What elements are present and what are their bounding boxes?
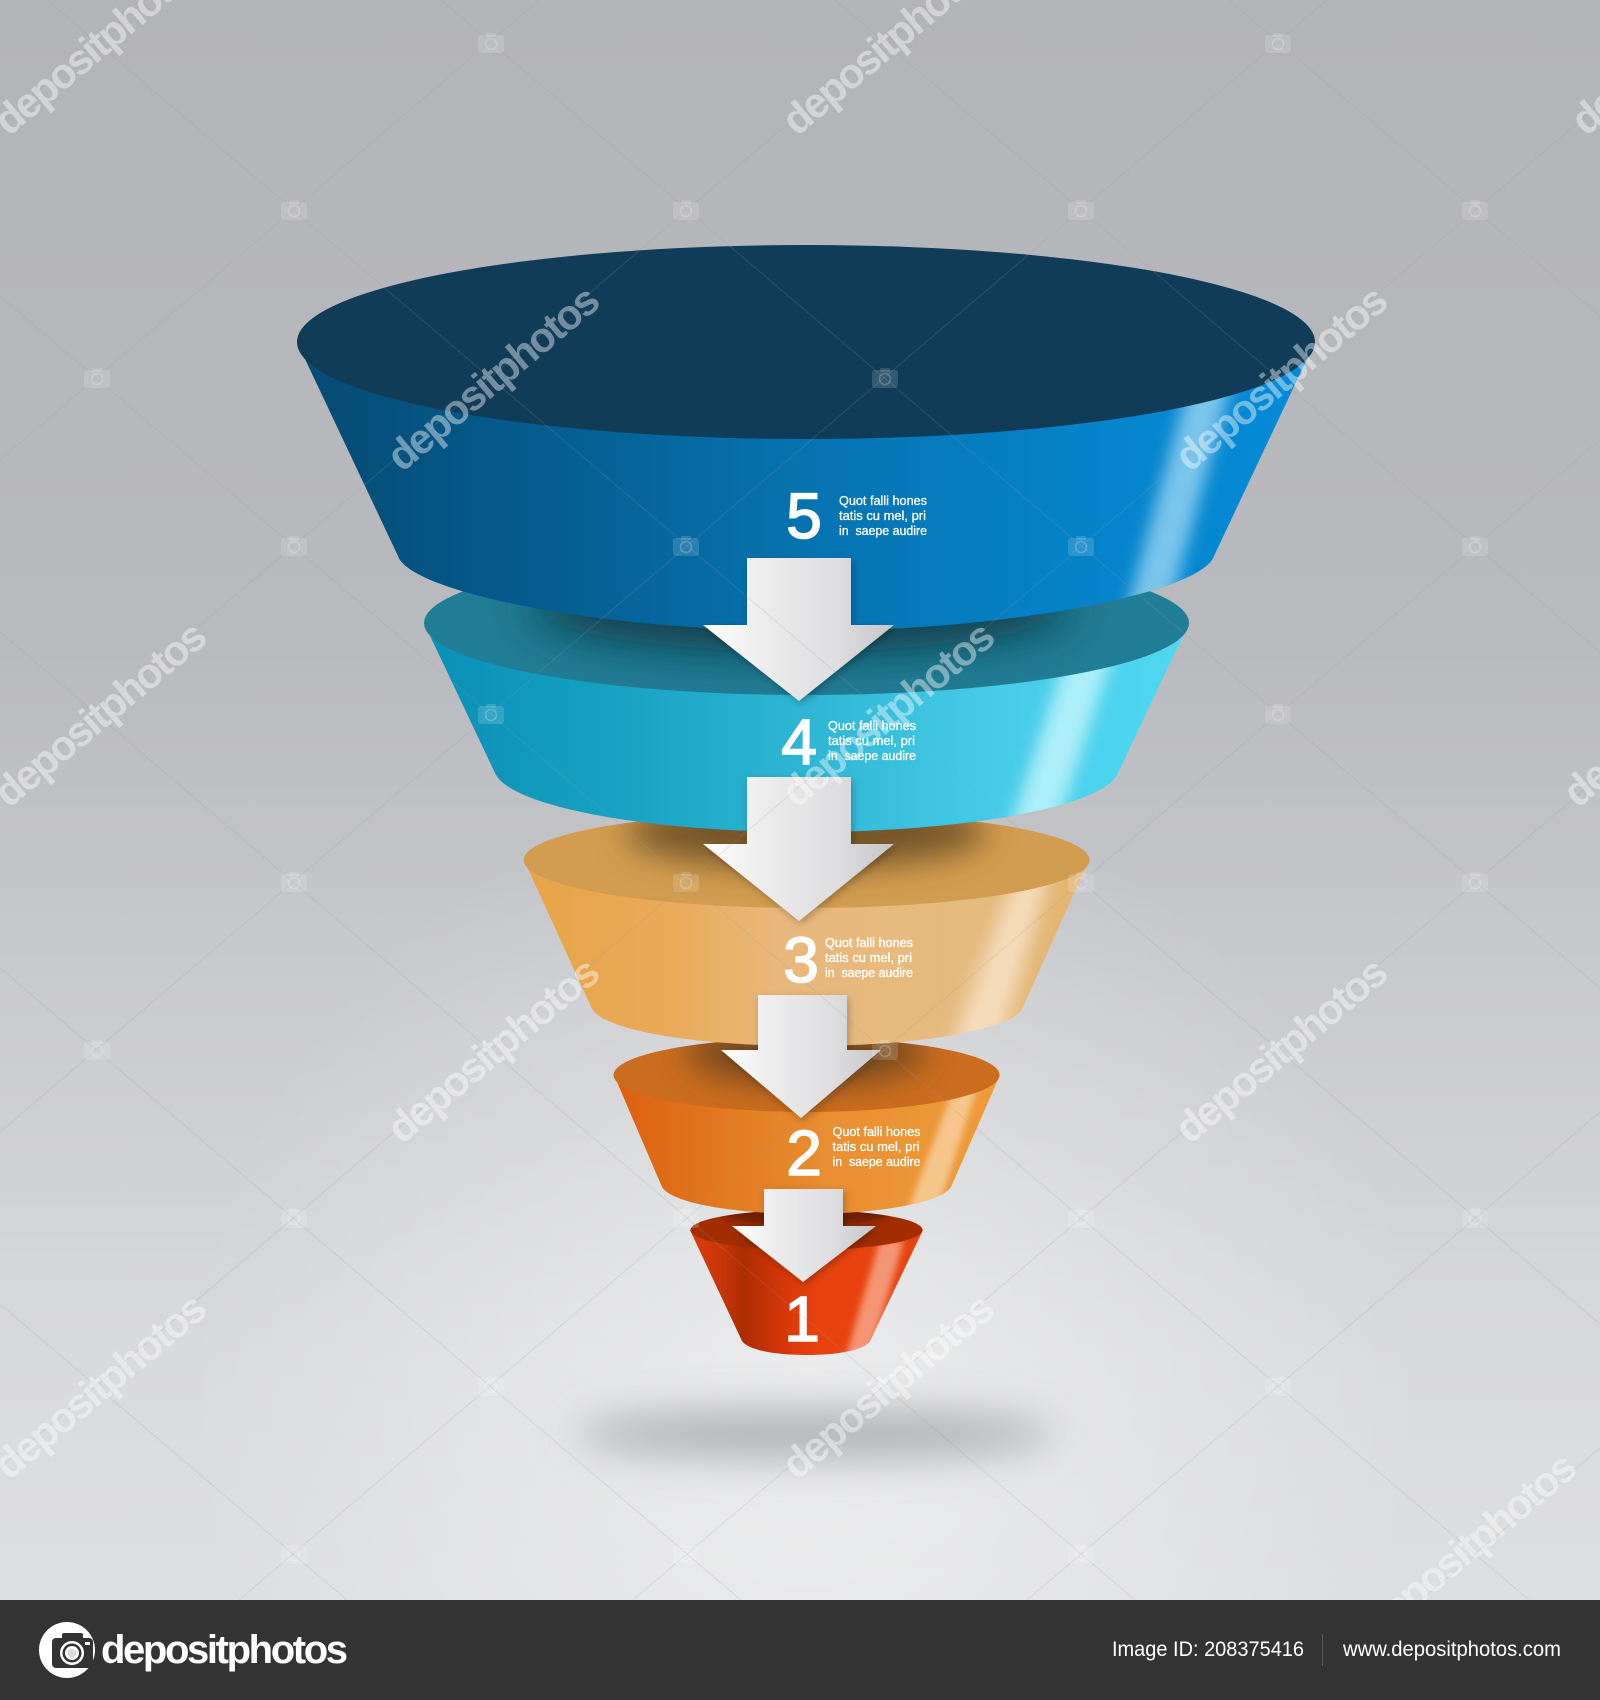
- arrow: 2 to 1: [732, 1189, 876, 1282]
- label 5: tatis cu mel, pri: [839, 509, 926, 523]
- watermark text: depositphotos: [378, 275, 608, 480]
- arrow: 4 to 3: [703, 777, 894, 921]
- label 4: Quot falli hones: [828, 719, 916, 733]
- watermark camera icons: [84, 33, 1488, 1564]
- label 3: 3: [783, 924, 819, 996]
- tier 2: [614, 1042, 1000, 1213]
- label 5: [786, 480, 927, 552]
- arrow: 5 to 4: [703, 558, 894, 701]
- funnel: [297, 245, 1315, 1356]
- website: www.depositphotos.com: [1342, 1638, 1561, 1661]
- footer bar: [0, 1600, 1600, 1700]
- label 5: 5: [786, 480, 822, 552]
- watermark text: depositphotos: [773, 611, 1003, 816]
- image id: Image ID: 208375416: [1112, 1638, 1304, 1661]
- label 2: in saepe audire: [832, 1155, 921, 1169]
- label 4: 4: [781, 706, 817, 778]
- label 3: [783, 924, 913, 996]
- floor shadow: [575, 1408, 1055, 1460]
- watermark text: depositphotos: [1166, 275, 1396, 480]
- label 5: Quot falli hones: [839, 494, 927, 508]
- label 2: 2: [786, 1117, 822, 1189]
- watermark text: depositphotos: [1355, 1442, 1585, 1647]
- tier 5: [297, 245, 1315, 635]
- footer logo: depositphotos: [101, 1628, 348, 1672]
- label 3: tatis cu mel, pri: [825, 951, 912, 965]
- label 2: Quot falli hones: [832, 1125, 920, 1139]
- watermark text: depositphotos: [773, 1283, 1003, 1488]
- watermark text: depositphotos: [1166, 947, 1396, 1152]
- label 4: [781, 706, 916, 778]
- label 3: Quot falli hones: [825, 936, 913, 950]
- tier 4: [424, 591, 1189, 832]
- label 5: in saepe audire: [839, 524, 927, 538]
- arrow: 3 to 2: [721, 995, 881, 1118]
- label 3: in saepe audire: [825, 966, 913, 980]
- tier 5 top face: [297, 245, 1315, 439]
- label 4: tatis cu mel, pri: [828, 734, 915, 748]
- watermark text: depositphotos: [378, 947, 608, 1152]
- label 4: in saepe audire: [828, 749, 916, 763]
- label 1: 1: [784, 1283, 820, 1355]
- footer logo: [39, 1622, 348, 1678]
- label 2: tatis cu mel, pri: [832, 1140, 920, 1154]
- tier 3: [524, 822, 1090, 1046]
- label 2: [786, 1117, 921, 1189]
- tier 1: [690, 1198, 923, 1356]
